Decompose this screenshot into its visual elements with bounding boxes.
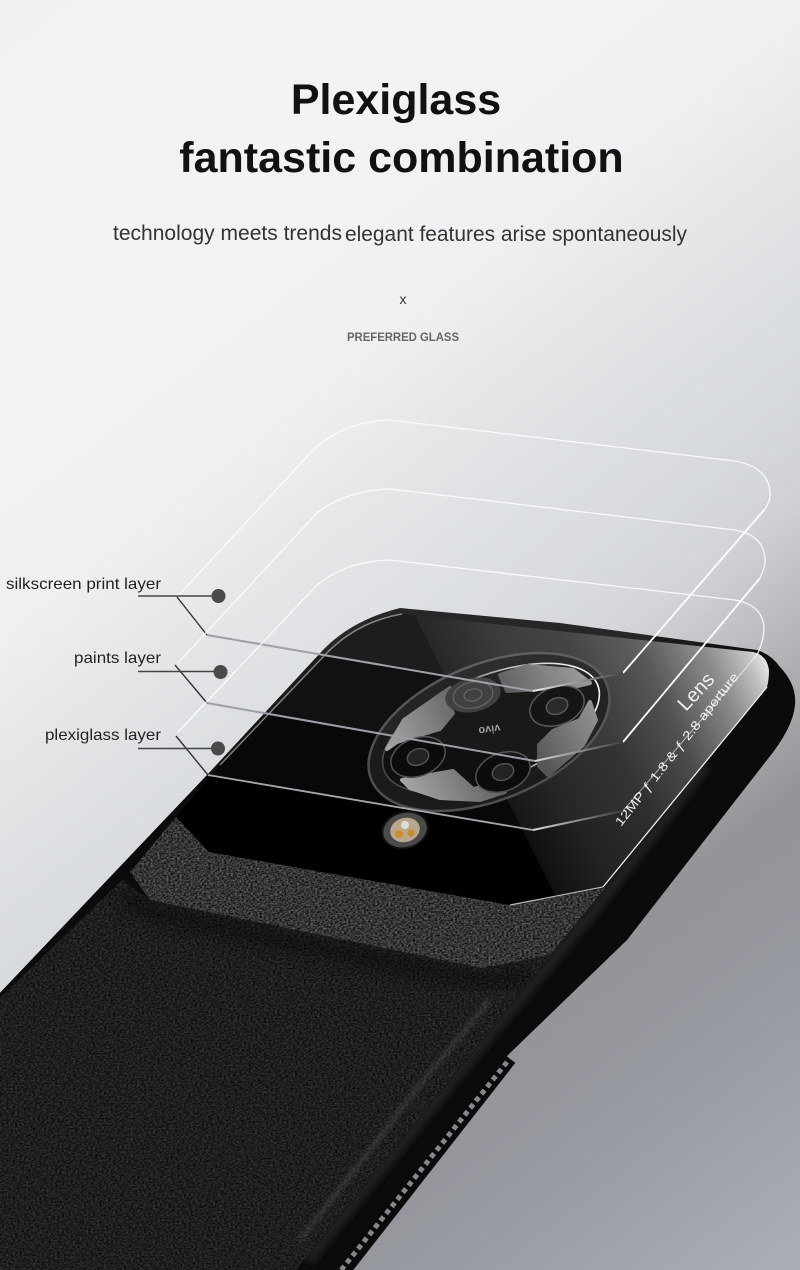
glass sheet: plexiglass layer <box>176 560 764 830</box>
glass sheet: paints layer <box>175 489 765 761</box>
lens bottom right <box>470 745 536 799</box>
callout: silkscreen print layer: silkscreen print layer <box>6 576 162 593</box>
title: fantastic combination <box>179 134 624 182</box>
textured leather band <box>130 817 605 968</box>
leather back panel <box>0 860 560 1270</box>
callout: silkscreen print layer <box>6 576 226 603</box>
lens top right <box>524 679 590 733</box>
phone case body <box>0 600 800 1270</box>
callout: paints layer <box>74 650 228 679</box>
preferred glass caption: PREFERRED GLASS <box>347 330 459 344</box>
subtitle: elegant features arise spontaneously <box>345 223 687 246</box>
glass sheet: silkscreen print layer <box>177 420 770 691</box>
callout: plexiglass layer <box>45 727 225 756</box>
bumper highlight <box>308 765 706 1260</box>
lens print text: 12MP ƒ 1.8 & ƒ 2.8 aperture <box>612 670 742 829</box>
camera ring <box>346 621 632 843</box>
lens top left <box>442 673 504 717</box>
callout: paints layer: paints layer <box>74 650 162 667</box>
camera module <box>346 621 632 843</box>
icon: side button strip <box>338 1058 509 1270</box>
glass sheets <box>175 420 770 830</box>
cross mark: x <box>400 291 406 307</box>
case outline <box>0 608 795 1270</box>
title <box>179 76 624 182</box>
glass plate <box>176 613 769 906</box>
camera petals <box>387 666 596 800</box>
lens print text <box>612 669 742 829</box>
lens print text: Lens <box>674 669 719 715</box>
subtitle: technology meets trends <box>113 222 342 245</box>
callout: plexiglass layer: plexiglass layer <box>45 727 162 744</box>
subtitle <box>113 222 687 246</box>
icon: flash <box>378 807 432 853</box>
title: Plexiglass <box>291 76 501 124</box>
camera disc <box>365 637 617 819</box>
lens bottom left <box>385 730 451 784</box>
camera brand text: vivo <box>477 721 501 736</box>
